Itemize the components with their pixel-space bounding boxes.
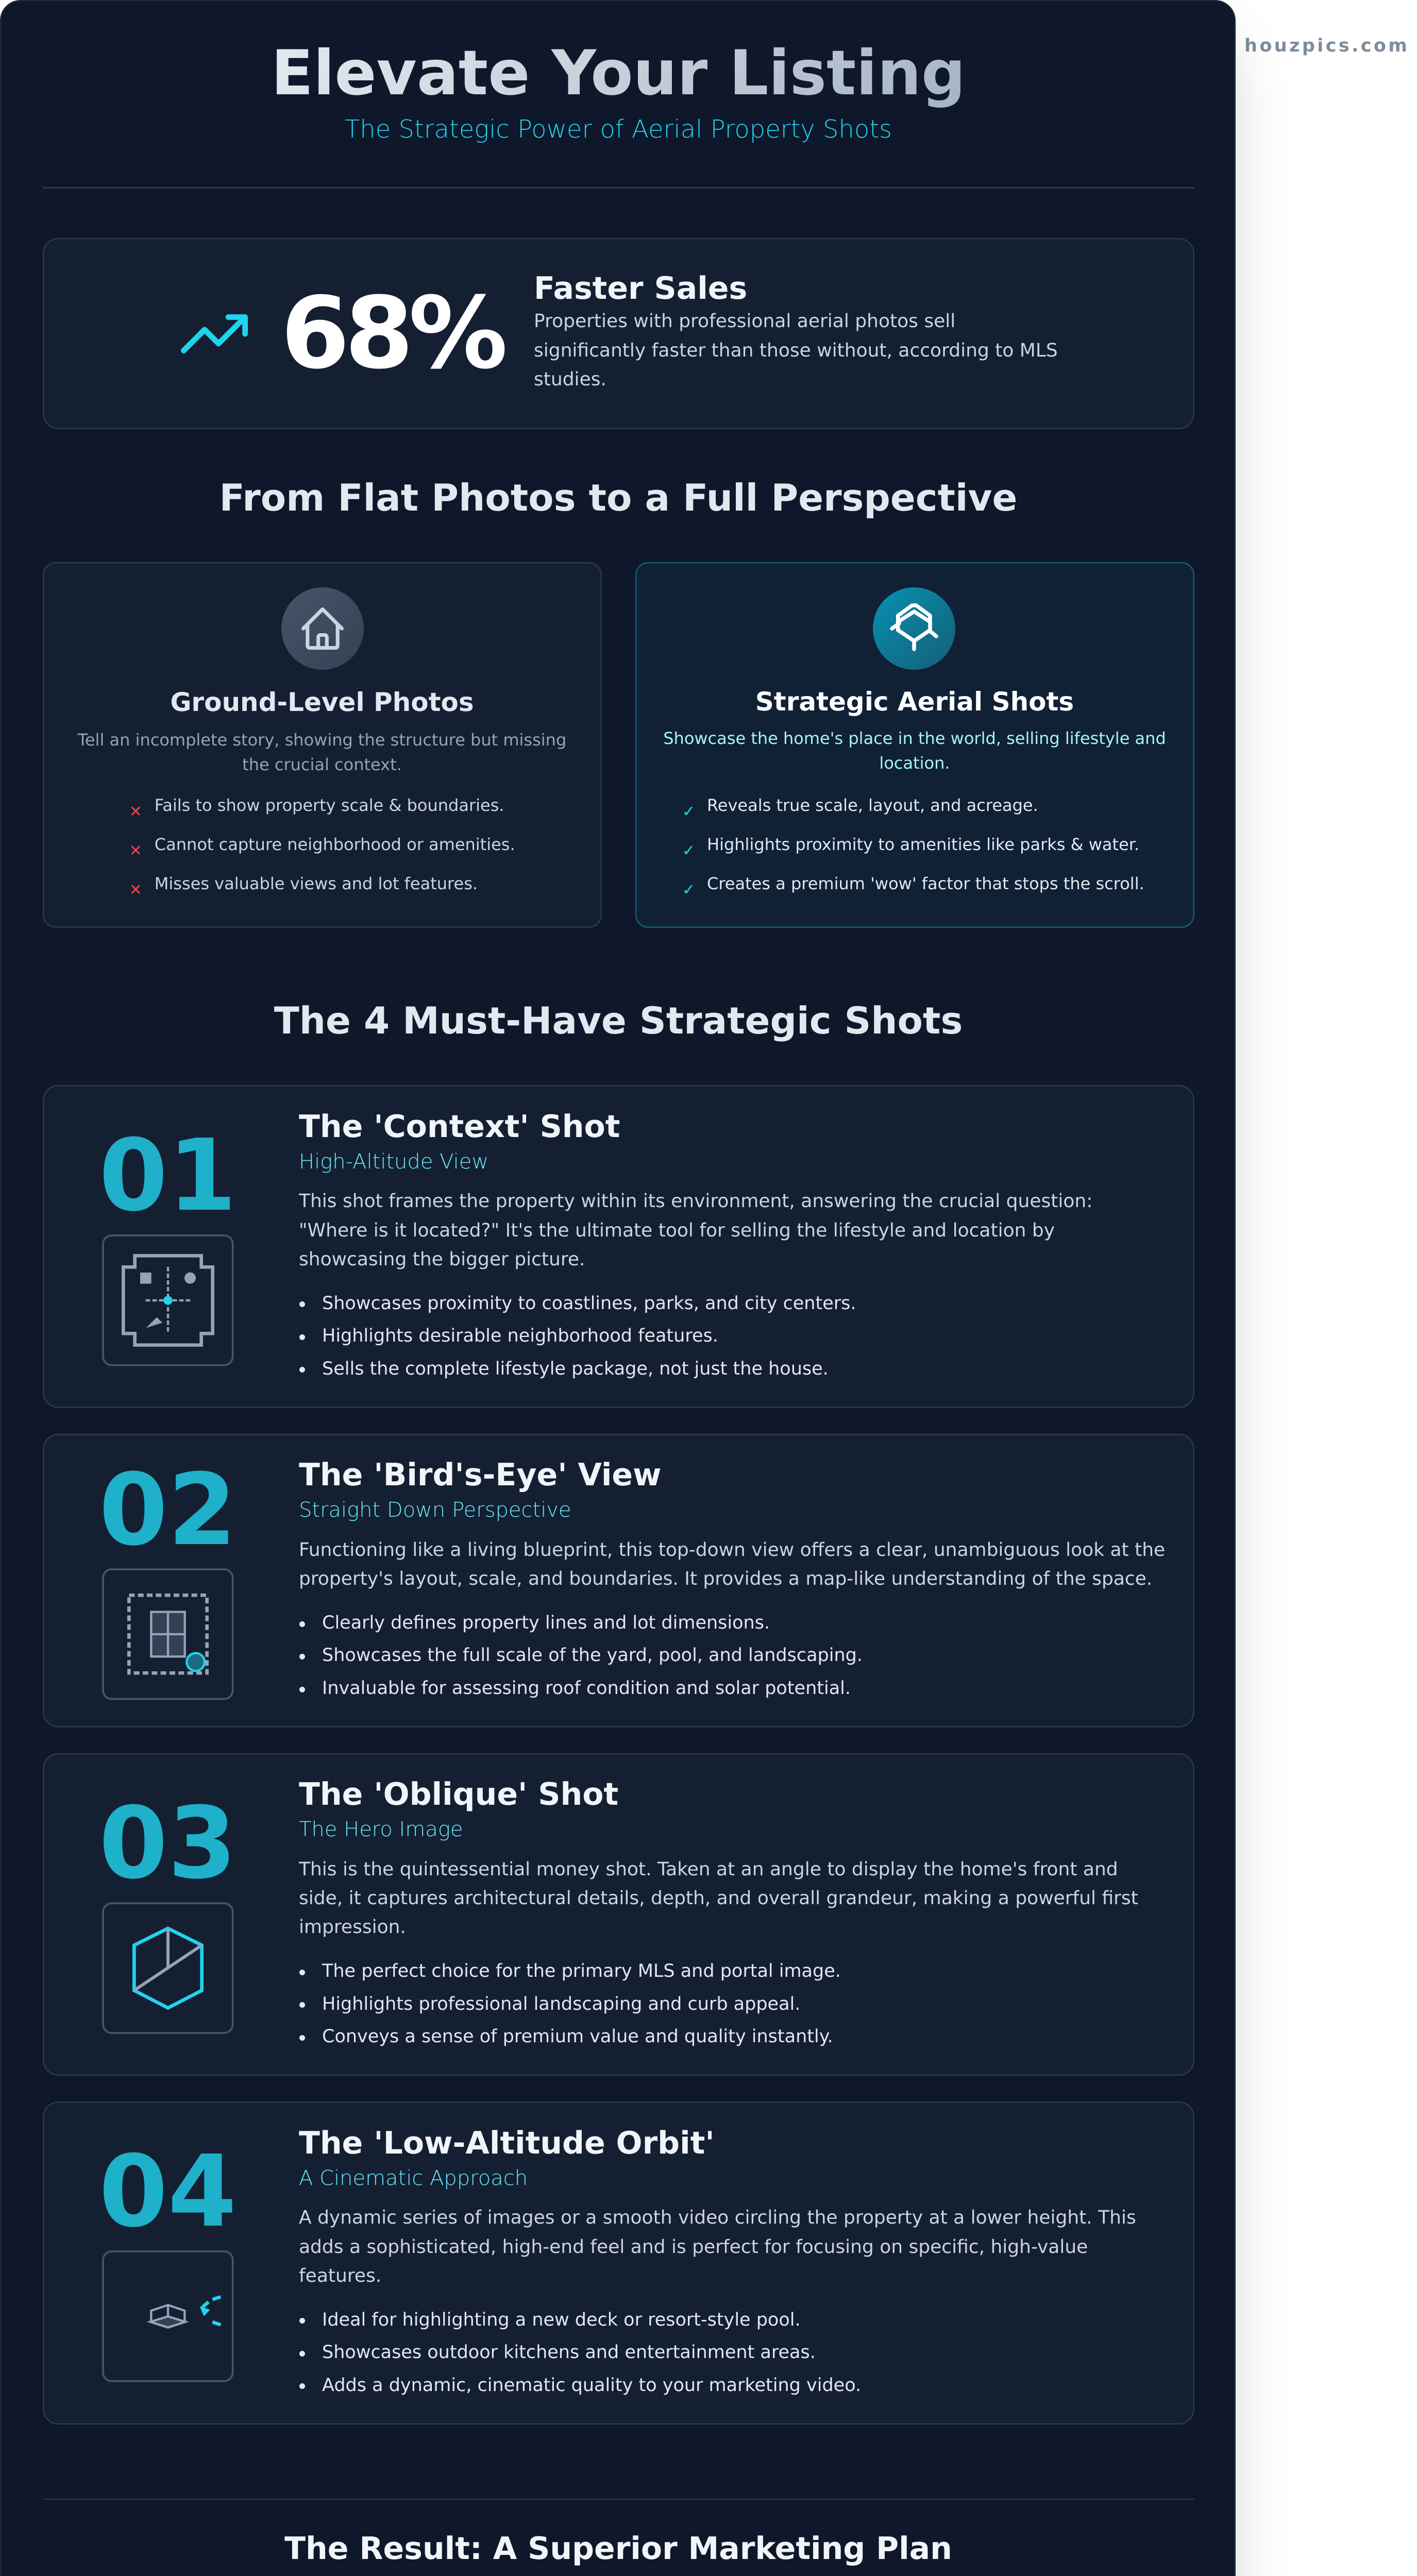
card description [663,728,1166,773]
shot description: Functioning like a living blueprint, this top-down view offers a clear, unambiguous look at the [299,1539,1165,1561]
shot bullet list [299,2310,861,2396]
card description: the crucial context. [242,754,402,774]
shot heading: The 'Low-Altitude Orbit' [299,2125,715,2161]
icon: house in circle [281,587,364,670]
list: benefits: Reveals true scale, layout, and acreage. [707,795,1038,815]
shot bullet list: The perfect choice for the primary MLS and portal image. [322,1961,841,1981]
shot bullet list: Ideal for highlighting a new deck or resort-style pool. [322,2310,801,2330]
shot heading: The 'Bird's-Eye' View [299,1457,662,1493]
shot subheading: The Hero Image [299,1818,463,1841]
card heading: Ground-Level Photos [170,687,474,717]
panel: 68% faster sales stat [42,238,1194,429]
card description: Showcase the home's place in the world, selling lifestyle and [663,728,1166,748]
watermark: houzpics.com: houzpics.com [1244,35,1409,56]
shot bullet list: Highlights professional landscaping and curb appeal. [322,1994,800,2014]
card heading: Strategic Aerial Shots [755,687,1074,717]
shot bullet list: Highlights desirable neighborhood features. [322,1326,718,1346]
heading: 4 must-have shots: The 4 Must-Have Strategic Shots [274,999,963,1042]
shot subheading: High-Altitude View [299,1150,488,1174]
shot description: side, it captures architectural details, depth, and overall grandeur, making a powerful first [299,1888,1138,1909]
stat heading: Faster Sales [534,270,747,307]
stat description [534,311,1058,390]
shot bullet list: Showcases proximity to coastlines, parks, and city centers. [322,1293,856,1314]
icon: top-down blueprint [102,1568,234,1700]
list: benefits [684,795,1144,893]
shot bullet list: Sells the complete lifestyle package, not just the house. [322,1359,829,1379]
shot description: "Where is it located?" It's the ultimate tool for selling the lifestyle and location by [299,1220,1055,1241]
shot description: features. [299,2265,381,2286]
shot description: A dynamic series of images or a smooth video circling the property at a lower height. This [299,2207,1136,2228]
shot description [299,2207,1136,2286]
shot description [299,1539,1165,1589]
list: drawbacks: Fails to show property scale & boundaries. [155,795,504,815]
icon: trending up arrow [181,314,248,353]
stat description: Properties with professional aerial photos sell [534,311,955,332]
shot bullet list: Showcases outdoor kitchens and entertainment areas. [322,2342,816,2363]
shot description: property's layout, scale, and boundaries. It provides a map-like understanding of the space. [299,1568,1152,1589]
list: drawbacks [131,795,515,894]
shot bullet list: Clearly defines property lines and lot dimensions. [322,1613,770,1633]
shot bullet list [299,1613,863,1699]
list: benefits: Highlights proximity to amenities like parks & water. [707,835,1139,854]
footer heading: The Result: A Superior Marketing Plan [284,2531,952,2567]
shot description: showcasing the bigger picture. [299,1249,585,1270]
number 04: 04 [99,2134,237,2249]
title: Elevate Your Listing [271,38,966,109]
title [42,38,1194,109]
icon: context map [102,1234,234,1366]
list: benefits: Creates a premium 'wow' factor that stops the scroll. [707,874,1144,893]
stat description: studies. [534,369,606,390]
number 01: 01 [99,1118,237,1233]
panel: ground-level photos [42,562,602,928]
shot bullet list: Adds a dynamic, cinematic quality to your marketing video. [322,2375,861,2396]
shot description: adds a sophisticated, high-end feel and is perfect for focusing on specific, high-value [299,2236,1088,2258]
shot bullet list: Invaluable for assessing roof condition and solar potential. [322,1678,851,1699]
shot subheading: Straight Down Perspective [299,1498,571,1522]
panel: shot 02 bird's-eye [42,1433,1194,1727]
shot bullet list: Showcases the full scale of the yard, pool, and landscaping. [322,1645,863,1666]
shot description: impression. [299,1917,406,1938]
list: drawbacks: Misses valuable views and lot features. [155,874,478,893]
panel: shot 01 context [42,1085,1194,1408]
icon: oblique cube [102,1902,234,2034]
shot description [299,1859,1138,1938]
number 03: 03 [99,1786,237,1901]
icon glyph: aerial house [890,603,938,651]
shot bullet list: Conveys a sense of premium value and quality instantly. [322,2026,833,2047]
stat description: significantly faster than those without, according to MLS [534,340,1058,361]
shot subheading: A Cinematic Approach [299,2166,528,2190]
shot description: This is the quintessential money shot. Taken at an angle to display the home's front and [299,1859,1118,1880]
shot description: This shot frames the property within its environment, answering the crucial question: [299,1191,1092,1212]
footer [42,2499,1194,2576]
panel: shot 03 oblique [42,1753,1194,2076]
stat number: 68% [281,276,503,391]
list: drawbacks: Cannot capture neighborhood or amenities. [155,835,515,854]
subtitle: The Strategic Power of Aerial Property Shots [345,114,892,143]
shot description [299,1191,1092,1270]
panel: strategic aerial shots [635,562,1194,928]
shot bullet list [299,1293,856,1379]
icon: orbit around house [102,2250,234,2382]
card description [77,730,566,774]
number 02: 02 [99,1453,237,1568]
panel: shot 04 low-altitude orbit [42,2102,1194,2425]
card description: location. [879,753,950,773]
shot heading: The 'Oblique' Shot [299,1776,618,1812]
heading: from flat photos: From Flat Photos to a Full Perspective [220,476,1017,519]
icon: aerial house in circle [873,587,955,670]
shot bullet list [299,1961,841,2047]
shot heading: The 'Context' Shot [299,1109,620,1145]
card description: Tell an incomplete story, showing the structure but missing [78,730,566,750]
